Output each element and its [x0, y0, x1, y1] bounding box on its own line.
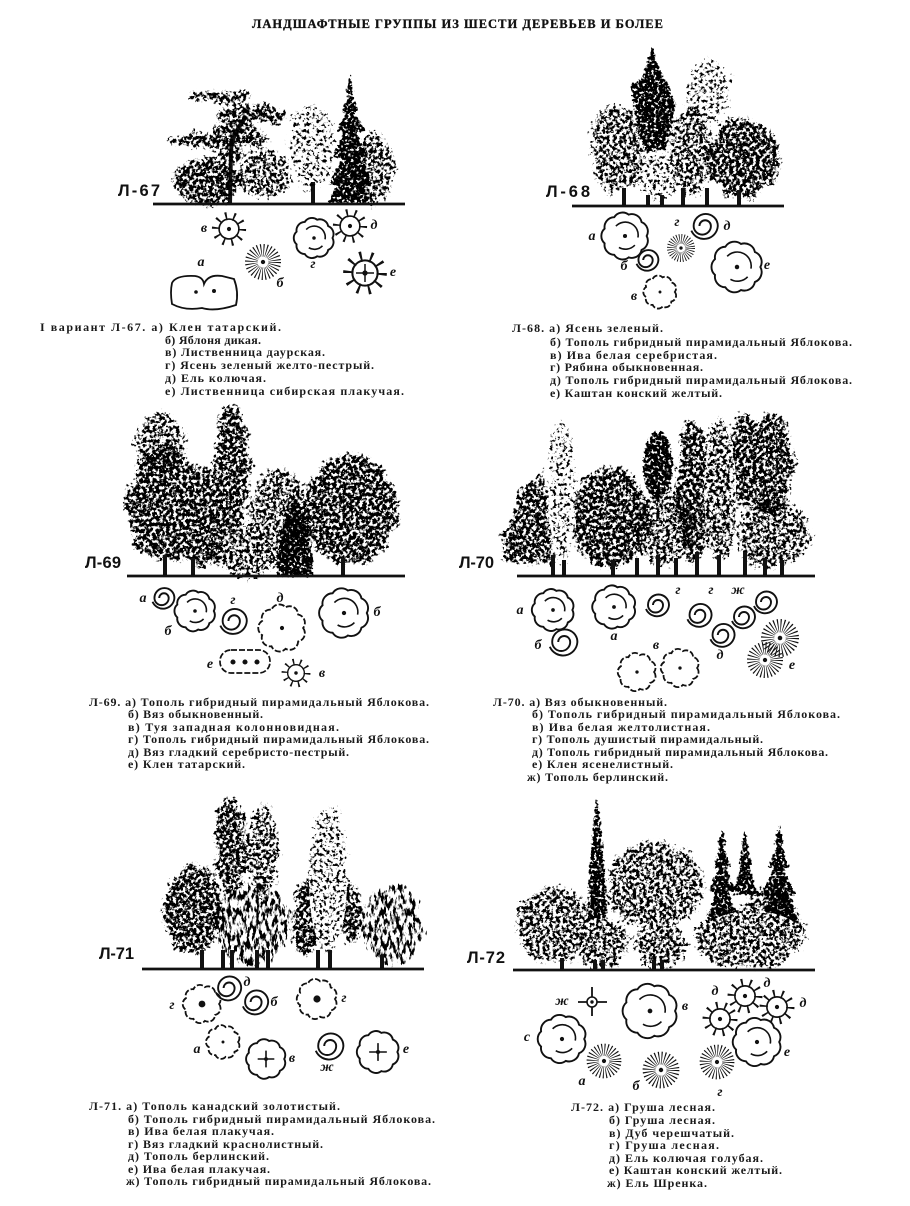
label Л-68: Л-68	[546, 183, 590, 201]
species list Л-71: в) Ива белая плакучая.	[128, 1124, 274, 1138]
plan letters: а	[140, 591, 146, 606]
plan letters	[140, 591, 382, 681]
bush	[173, 158, 241, 206]
icon: б left	[174, 591, 215, 631]
icon: а	[593, 1050, 615, 1072]
plan letters: б	[374, 605, 382, 620]
icon: д	[710, 624, 735, 647]
right tree	[735, 497, 811, 569]
plan letters: г	[230, 593, 236, 608]
ground line	[572, 205, 784, 207]
species list Л-72: в) Дуб черешчатый.	[609, 1126, 734, 1140]
panel: Л-70	[459, 413, 840, 784]
plan letters: б	[270, 995, 278, 1010]
ground line	[513, 969, 815, 971]
panel: Л-68	[512, 45, 852, 400]
icon: б	[243, 990, 268, 1014]
left big tree	[126, 448, 230, 567]
icon: а	[171, 276, 237, 309]
fir trees	[706, 823, 803, 930]
icon: д left	[707, 1006, 733, 1032]
dark pyramidal poplar	[630, 45, 676, 152]
species list Л-70: Л-70. а) Вяз обыкновенный.	[493, 695, 667, 709]
plan letters: б	[632, 1079, 640, 1094]
species list Л-72: ж) Ель Шренка.	[607, 1176, 707, 1190]
species list Л-69	[89, 695, 429, 771]
tree illustration Л-69	[126, 404, 399, 577]
icon: ж	[316, 1033, 343, 1060]
plan letters: г	[674, 215, 680, 230]
species list Л-70: г) Тополь душистый пирамидальный.	[532, 732, 763, 746]
plan letters: в	[653, 638, 660, 653]
planting plan Л-69	[140, 588, 382, 684]
icon: г 1	[646, 594, 669, 616]
plan letters: с	[524, 1030, 531, 1045]
maple tree	[166, 91, 287, 204]
plan letters	[588, 215, 770, 304]
icon: г	[706, 1051, 728, 1073]
light ash tree	[287, 101, 335, 204]
species list Л-71: г) Вяз гладкий краснолистный.	[128, 1137, 323, 1151]
icon: в	[623, 984, 676, 1038]
icon: е	[348, 256, 382, 290]
left elm	[163, 866, 223, 954]
icon: г	[672, 239, 690, 257]
plan letters: е	[390, 265, 396, 280]
species list Л-72: б) Груша лесная.	[609, 1113, 715, 1127]
dark band poplar	[676, 418, 710, 562]
species list Л-68: д) Тополь гибридный пирамидальный Яблокова.	[550, 373, 852, 387]
plan letters: д	[371, 218, 378, 233]
species list Л-69: в) Туя западная колонновидная.	[128, 720, 339, 734]
label Л-69: Л-69	[85, 554, 121, 572]
light poplar	[307, 803, 349, 957]
apple tree	[238, 148, 292, 200]
species list Л-72: д) Ель колючая голубая.	[609, 1151, 763, 1165]
second row	[633, 490, 697, 566]
species list Л-67	[40, 320, 404, 398]
icon: а	[153, 588, 174, 609]
species list Л-68: г) Рябина обыкновенная.	[550, 360, 703, 374]
icon: е 1	[768, 626, 792, 650]
trunks	[165, 555, 343, 576]
upper right dark poplars	[728, 413, 793, 517]
plan letters: а	[194, 1042, 200, 1057]
plan letters: ж	[320, 1060, 334, 1075]
label Л-72: Л-72	[467, 949, 505, 967]
left elm	[502, 466, 555, 565]
pale pyramidal poplar	[548, 416, 576, 566]
light pale tree	[634, 148, 680, 202]
lower central tree	[210, 523, 280, 577]
planting plan Л-71	[169, 975, 409, 1079]
plan letters: б	[534, 638, 542, 653]
icon: е	[733, 1018, 780, 1066]
plan letters: в	[682, 999, 689, 1014]
icon: а right	[592, 585, 635, 629]
plan letters: а	[516, 603, 524, 618]
species list Л-70: в) Ива белая желтолистная.	[532, 720, 710, 734]
plan letters: г	[169, 998, 175, 1013]
icon: в	[643, 275, 676, 309]
right elm	[305, 454, 399, 566]
icon: г	[220, 609, 247, 634]
plan letters: а	[588, 229, 596, 244]
plan letters: г	[708, 583, 714, 598]
icon: е	[357, 1031, 398, 1073]
center right tree	[248, 467, 312, 567]
central willows	[212, 883, 292, 967]
chestnut bush	[692, 885, 808, 969]
plan letters: в	[289, 1051, 296, 1066]
plan letters: в	[319, 666, 326, 681]
icon: е 2	[753, 648, 777, 672]
icon: ж	[578, 987, 607, 1016]
species list Л-67: б) Яблоня дикая.	[165, 333, 261, 347]
plan letters: г	[310, 257, 316, 272]
panel: Л-69	[85, 404, 429, 771]
plan letters	[198, 218, 396, 291]
plan letters: в	[201, 221, 208, 236]
species list Л-71	[89, 1099, 435, 1188]
icon: а trunks	[194, 289, 216, 294]
icon: в	[285, 662, 307, 684]
tall left crown	[135, 412, 185, 472]
icon: а	[601, 213, 648, 259]
ground line	[127, 575, 405, 577]
species list Л-70	[493, 695, 840, 784]
icon: ж 1	[732, 606, 755, 628]
species list Л-67: е) Лиственница сибирская плакучая.	[165, 384, 404, 398]
species list Л-70: е) Клен ясенелистный.	[532, 757, 673, 771]
second poplar	[245, 802, 279, 902]
species list Л-71: Л-71. а) Тополь канадский золотистый.	[89, 1099, 340, 1113]
icon: б	[649, 1058, 673, 1082]
plan letters	[169, 975, 409, 1075]
species list Л-69: г) Тополь гибридный пирамидальный Яблокова.	[128, 732, 429, 746]
icon: д	[216, 976, 241, 1000]
trunks	[562, 958, 662, 970]
middle row	[572, 466, 648, 570]
species list Л-72: Л-72. а) Груша лесная.	[571, 1100, 715, 1114]
icon: д	[337, 213, 363, 239]
species list Л-68: в) Ива белая серебристая.	[550, 348, 717, 362]
icon: г left	[183, 985, 221, 1023]
planting plan Л-67	[171, 213, 396, 309]
species list Л-70: б) Тополь гибридный пирамидальный Яблокова.	[532, 707, 840, 721]
icon: д	[691, 214, 718, 239]
plan letters: д	[244, 975, 251, 990]
icon: г right	[297, 979, 336, 1019]
birch	[352, 131, 394, 205]
plan letters: г	[675, 583, 681, 598]
icon: г 2	[687, 604, 712, 627]
dark tree right of centre	[291, 880, 362, 956]
oak	[606, 840, 704, 932]
species list Л-68: е) Каштан конский желтый.	[550, 386, 722, 400]
plan letters: б	[620, 259, 628, 274]
plan letters: д	[800, 996, 807, 1011]
icon: б	[550, 629, 577, 656]
left tree	[590, 101, 644, 193]
species list Л-67: д) Ель колючая.	[165, 371, 266, 385]
species list Л-69: д) Вяз гладкий серебристо-пестрый.	[128, 745, 349, 759]
icon: с	[538, 1015, 585, 1063]
dark poplar	[643, 431, 673, 499]
plan letters: в	[631, 289, 638, 304]
plan letters: е	[403, 1042, 409, 1057]
species list Л-72: г) Груша лесная.	[609, 1138, 719, 1152]
trunks	[624, 188, 739, 205]
tree illustration Л-67	[166, 73, 394, 206]
plan letters: е	[784, 1045, 790, 1060]
plan letters: ж	[555, 994, 569, 1009]
thuja cone	[277, 493, 313, 577]
plan letters: б	[276, 276, 284, 291]
tree illustration Л-72	[515, 795, 808, 970]
plan letters: б	[164, 624, 172, 639]
plan letters: г	[341, 991, 347, 1006]
tree illustration Л-68	[590, 45, 780, 205]
plan letters: д	[712, 984, 719, 999]
trunks	[202, 950, 382, 969]
plan letters	[524, 976, 807, 1100]
ground line	[142, 968, 424, 970]
panel: Л-72	[467, 795, 815, 1190]
columnar tree	[587, 795, 607, 920]
panel: Л-71	[89, 796, 435, 1188]
species list Л-71: б) Тополь гибридный пирамидальный Яблокова.	[128, 1112, 435, 1126]
species list Л-67: в) Лиственница даурская.	[165, 345, 325, 359]
icon: ж 2	[754, 592, 777, 613]
plan letters: а	[198, 255, 204, 270]
tree illustration Л-71	[163, 796, 425, 969]
title: ЛАНДШАФТНЫЕ ГРУППЫ ИЗ ШЕСТИ ДЕРЕВЬЕВ И БОЛЕЕ	[252, 17, 663, 31]
icon: а	[206, 1025, 239, 1059]
icon: в	[246, 1039, 285, 1079]
lower pears	[573, 918, 689, 969]
species list Л-68: б) Тополь гибридный пирамидальный Яблокова.	[550, 335, 852, 349]
label Л-70: Л-70	[459, 554, 494, 572]
icon: д right	[764, 994, 790, 1020]
panel: Л-67	[40, 73, 405, 398]
planting plan Л-70	[516, 583, 795, 691]
species list Л-69: е) Клен татарский.	[128, 757, 245, 771]
species list Л-71: д) Тополь берлинский.	[128, 1149, 269, 1163]
tall poplars	[215, 796, 247, 900]
species list Л-67: I вариант Л-67. а) Клен татарский.	[40, 320, 281, 334]
species list Л-71: е) Ива белая плакучая.	[128, 1162, 270, 1176]
plan letters: е	[764, 258, 770, 273]
ground line	[153, 203, 405, 205]
plan letters: ж	[731, 583, 745, 598]
species list Л-72: е) Каштан конский желтый.	[609, 1163, 782, 1177]
tree illustration Л-70	[502, 413, 811, 576]
plan letters: д	[724, 219, 731, 234]
icon: в	[216, 216, 242, 242]
species list Л-69: б) Вяз обыкновенный.	[128, 707, 263, 721]
label Л-71: Л-71	[99, 945, 134, 963]
icon: а left	[532, 589, 573, 631]
plan letters: г	[717, 1085, 723, 1100]
trunks	[553, 552, 782, 576]
plan letters: а	[578, 1074, 586, 1089]
icon: е	[220, 650, 270, 673]
icon: б	[251, 250, 275, 274]
species list Л-69: Л-69. а) Тополь гибридный пирамидальный Яблокова.	[89, 695, 429, 709]
planting plan Л-68	[588, 213, 770, 309]
icon: д	[258, 604, 305, 652]
plan letters: д	[717, 648, 724, 663]
icon: в 1	[618, 653, 656, 691]
species list Л-71: ж) Тополь гибридный пирамидальный Яблокова.	[126, 1174, 431, 1188]
plan letters	[516, 583, 795, 673]
plan letters: д	[277, 591, 284, 606]
plan letters: а	[610, 629, 618, 644]
species list Л-68: Л-68. а) Ясень зеленый.	[512, 321, 663, 335]
planting plan Л-72	[524, 976, 807, 1100]
icon: в 2	[661, 649, 699, 687]
icon: е	[711, 242, 762, 292]
plan letters: е	[789, 658, 795, 673]
species list Л-70: д) Тополь гибридный пирамидальный Яблокова.	[532, 745, 828, 759]
plan letters: е	[207, 657, 213, 672]
central pyramidal poplar	[214, 404, 250, 536]
left pear tree	[515, 885, 591, 965]
species list Л-68	[512, 321, 852, 400]
label Л-67: Л-67	[118, 182, 160, 200]
icon: б right	[319, 588, 368, 638]
light top tree	[685, 58, 731, 126]
light poplar	[702, 416, 738, 564]
plan letters: д	[764, 976, 771, 991]
species list Л-72	[571, 1100, 782, 1190]
species list Л-67: г) Ясень зеленый желто-пестрый.	[165, 358, 374, 372]
ground line	[517, 575, 815, 577]
species list Л-70: ж) Тополь берлинский.	[527, 770, 668, 784]
icon: б	[637, 250, 658, 271]
spruce	[328, 73, 373, 203]
icon: г	[294, 218, 334, 258]
center tree	[668, 105, 712, 199]
right weeping willow	[361, 885, 425, 965]
dark round tree	[706, 117, 780, 199]
icon: д top	[732, 983, 758, 1009]
